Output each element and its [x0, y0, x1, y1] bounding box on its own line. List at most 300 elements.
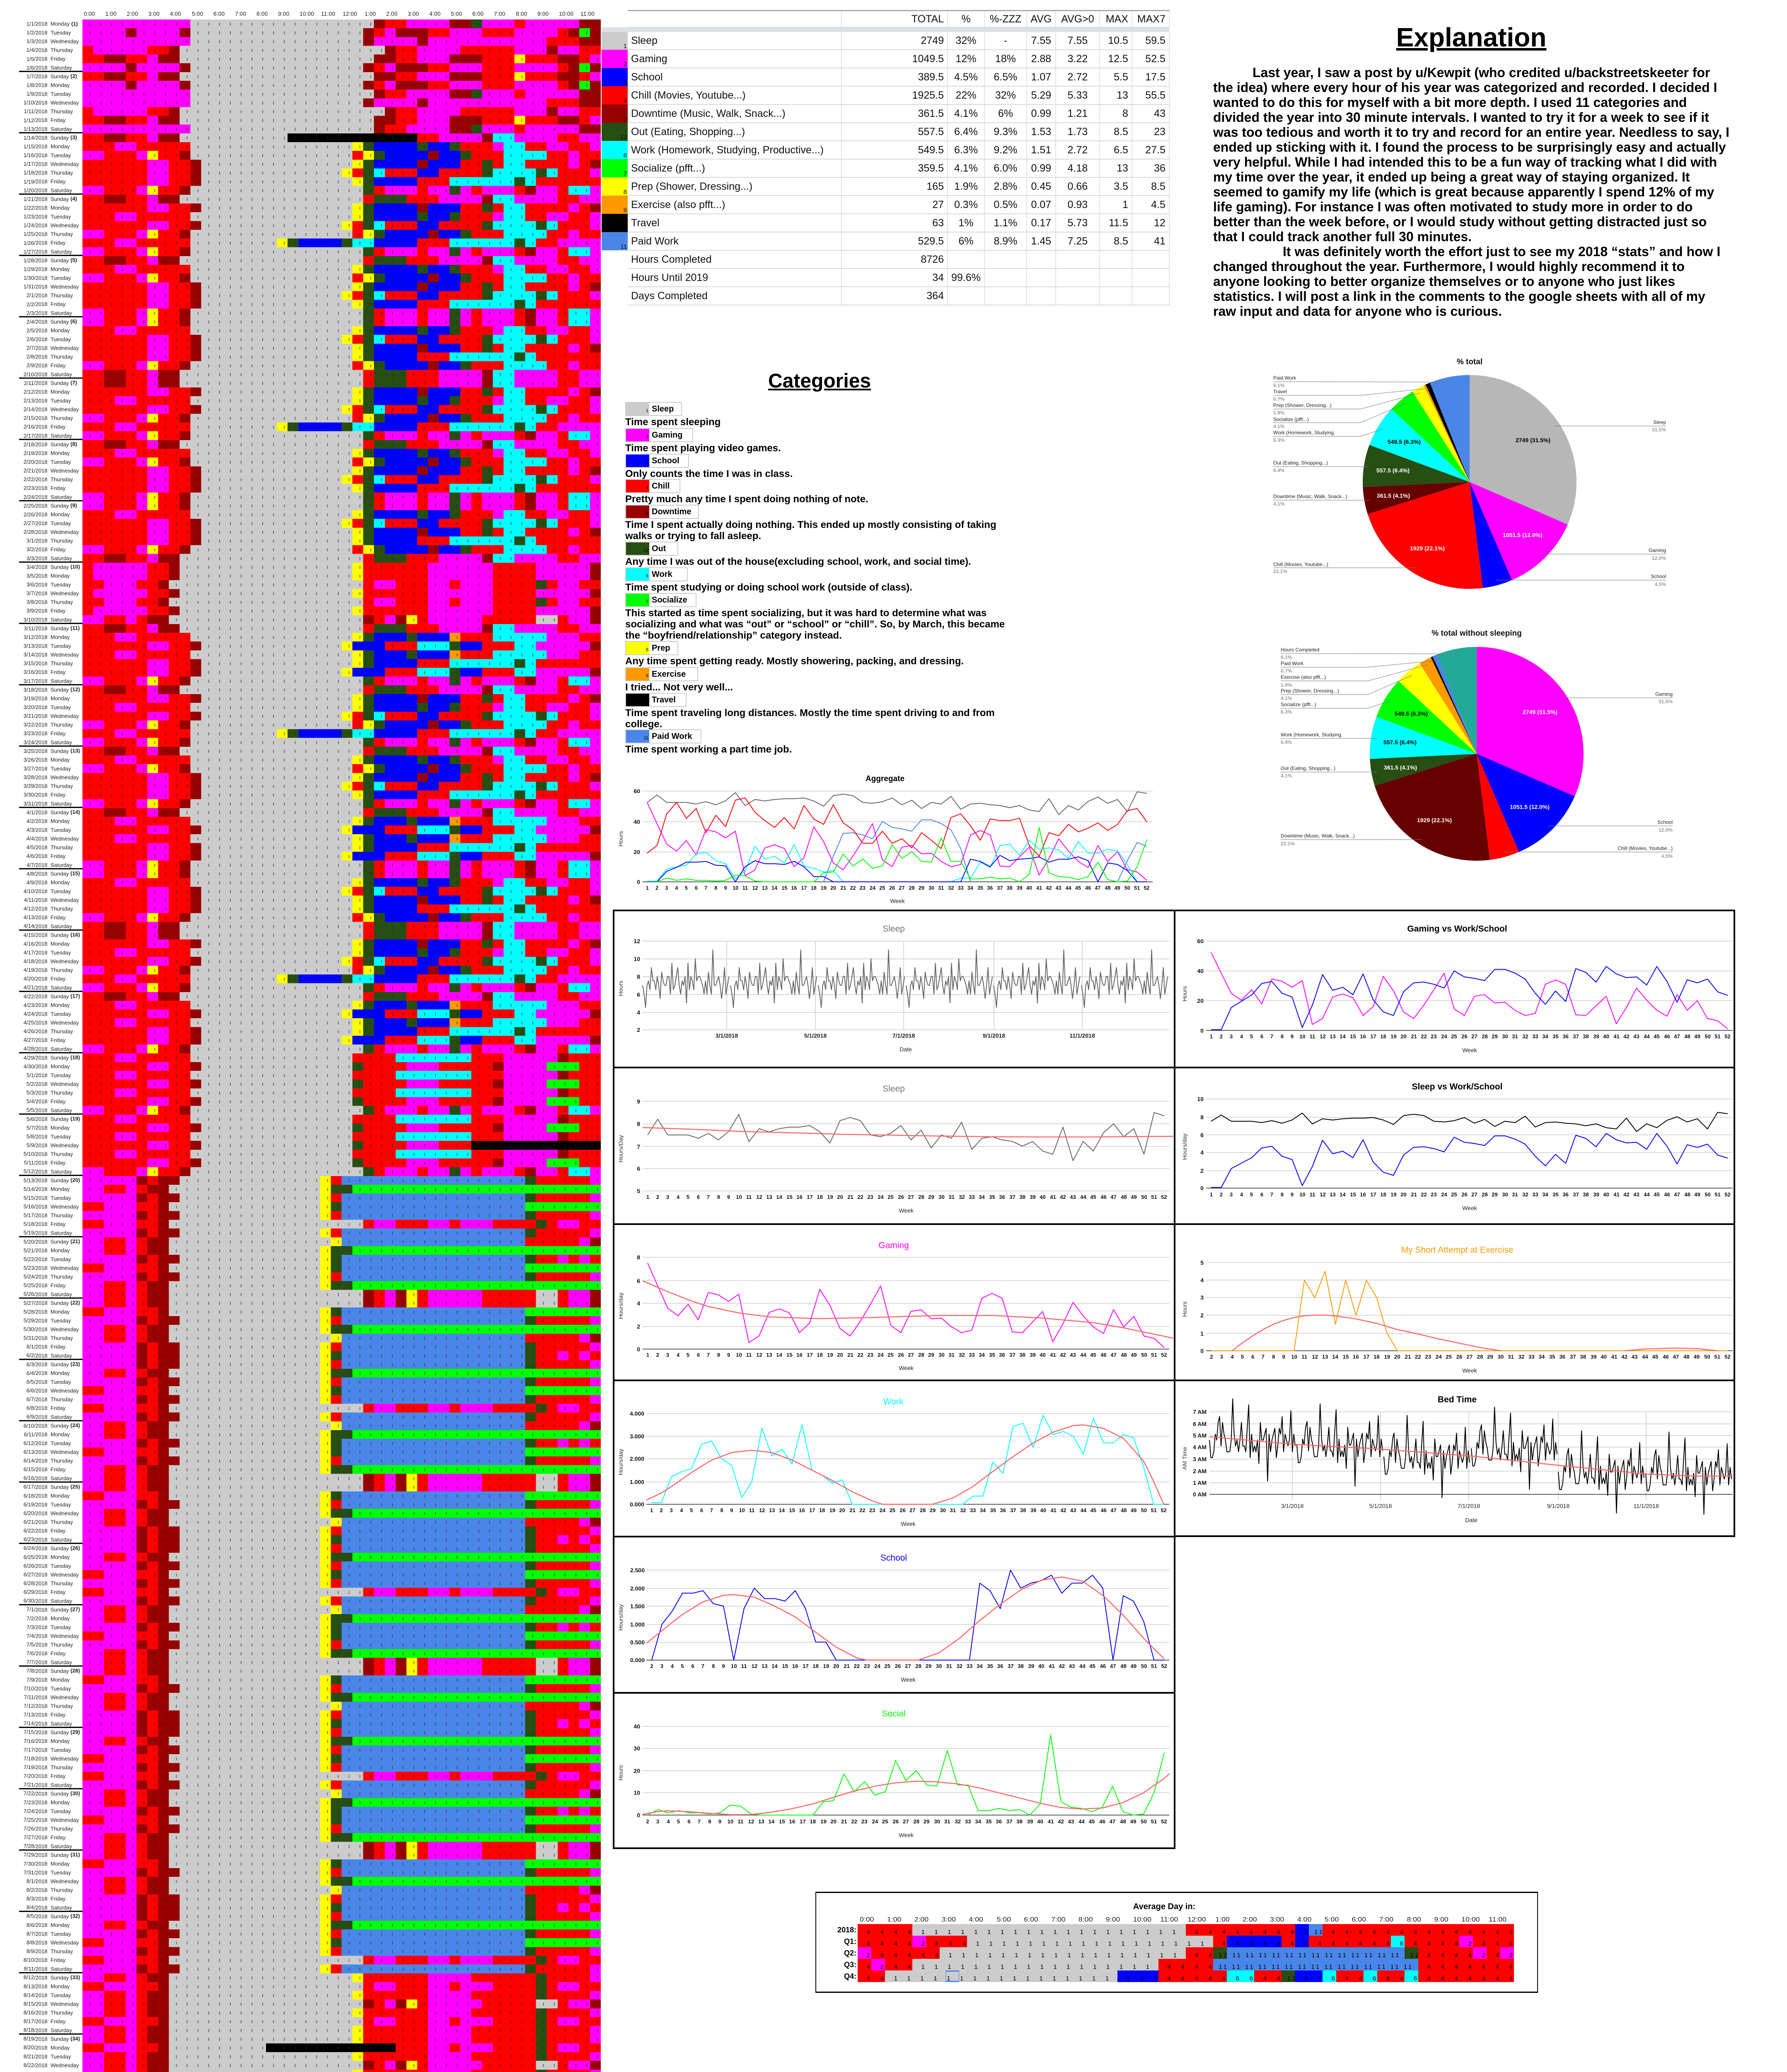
Average Day cell grid: [858, 1924, 1514, 1982]
Average Day row labels: Q1:: [844, 1937, 856, 1946]
pie chart: % total without sleeping: 2749 (31.5%): [1523, 709, 1557, 715]
panel: Bed Time chart: 3 AM: [1193, 1456, 1207, 1462]
legend: Sleep: Time spent sleeping: [625, 416, 721, 428]
pie chart: % total: 557.5 (6.4%): [1376, 467, 1410, 474]
chart: Aggregate weekly hours: 0: [637, 879, 640, 885]
legend: Downtime: [625, 505, 996, 542]
pie chart: % total without sleeping: 361.5 (4.1%): [1384, 764, 1417, 771]
summary statistics table: 8.5: [1151, 181, 1166, 192]
summary statistics table: 3: [624, 79, 627, 86]
legend: Prep: [625, 641, 964, 667]
summary statistics table: 1.9%: [954, 181, 978, 192]
summary statistics table: 1.51: [1031, 144, 1051, 156]
legend: Prep: 8: [646, 647, 648, 652]
summary statistics table: 6.0%: [994, 162, 1017, 174]
summary statistics table: 557.5: [918, 126, 944, 138]
summary statistics table: 165: [926, 181, 944, 192]
legend: Gaming: 2: [646, 434, 648, 439]
panel: Sleep weekly chart: 8: [637, 1121, 640, 1127]
legend: Travel: [625, 693, 995, 730]
Average Day row labels: Q4:: [844, 1972, 856, 1980]
explanation body text: life gaming). For instance I was often motivated to study more in order to do: [1213, 199, 1693, 214]
legend: Socialize: 7: [646, 599, 648, 604]
summary statistics table: Exercise (also pfft...): [631, 199, 725, 211]
summary statistics table: 529.5: [918, 235, 944, 247]
summary statistics table: 364: [926, 290, 944, 302]
summary statistics table: Downtime (Music, Walk, Snack...): [631, 108, 786, 119]
summary statistics table: 4.18: [1068, 162, 1088, 174]
panel: Gaming vs Work/School chart: Gaming vs Work/School: [1407, 924, 1507, 934]
pie chart: % total: 0.7%: [1273, 396, 1285, 402]
panel: Sleep vs Work/School chart: 6: [1200, 1132, 1204, 1138]
explanation body text: divided the year into 30 minute intervals. I wanted to try it for a week to see if it: [1213, 110, 1709, 125]
summary statistics table: 0.17: [1031, 217, 1051, 229]
panel: School weekly chart: Week: [901, 1676, 916, 1683]
pie chart: % total: 4.1%: [1273, 501, 1285, 507]
summary statistics table: Hours Until 2019: [631, 272, 708, 283]
pie chart: % total: Prep (Shower, Dressing...): [1273, 402, 1332, 408]
summary statistics table: 11.5: [1109, 217, 1128, 229]
summary statistics table: 0.93: [1068, 199, 1088, 211]
pie chart: % total without sleeping: Work (Homework, Studying,: [1281, 732, 1342, 738]
summary statistics table: 4: [624, 97, 627, 104]
pie chart: % total without sleeping: 12.0%: [1659, 827, 1673, 833]
pie chart: % total without sleeping: 1929 (22.1%): [1417, 817, 1452, 823]
pie chart: % total without sleeping: 557.5 (6.4%): [1383, 739, 1417, 746]
pie chart: % total without sleeping: [1281, 629, 1673, 859]
summary statistics table: 8.5: [1114, 126, 1128, 138]
legend: Socialize: This started as time spent socializing, but it was hard to determine what was: [625, 608, 987, 619]
summary statistics table: 6: [624, 152, 627, 159]
summary statistics table: 23: [1154, 126, 1166, 138]
legend: Chill: Chill: [652, 482, 670, 491]
summary statistics table: 0.07: [1031, 199, 1051, 211]
pie chart: % total: Travel: [1273, 389, 1287, 395]
panel: Work weekly chart: 0.000: [630, 1501, 644, 1508]
panel: Gaming vs Work/School chart: 40: [1197, 968, 1204, 974]
panel: School weekly chart: 2.000: [630, 1585, 645, 1592]
panel: My Short Attempt at Exercise chart: 4: [1200, 1277, 1204, 1283]
summary statistics table: 2.72: [1068, 144, 1088, 156]
panel: My Short Attempt at Exercise chart: 3: [1200, 1294, 1204, 1301]
summary statistics table: 5.29: [1031, 90, 1051, 101]
summary statistics table: 1.1%: [994, 217, 1017, 229]
legend: Out: 12: [643, 548, 648, 553]
panel: Sleep vs Work/School chart: 4: [1200, 1149, 1204, 1156]
panel: Sleep daily chart: 11/1/2018: [1069, 1032, 1095, 1039]
panel: Social weekly chart: 20: [634, 1767, 640, 1774]
legend: Downtime: walks or trying to fall asleep.: [625, 530, 761, 542]
pie chart: % total: % total: [1457, 358, 1482, 366]
panel: Social weekly chart: Social: [882, 1709, 906, 1719]
pie chart: % total: 1.9%: [1273, 410, 1285, 416]
panel: Gaming weekly chart: 0: [637, 1346, 640, 1353]
panel: Bed Time chart: 0 AM: [1193, 1491, 1207, 1498]
chart: Aggregate weekly hours: 20: [634, 849, 640, 855]
summary statistics table: 8: [624, 189, 627, 196]
legend: School: Only counts the time I was in class.: [625, 468, 793, 479]
legend: Travel: college.: [625, 719, 662, 730]
panel: Sleep daily chart: 9/1/2018: [983, 1032, 1005, 1039]
summary statistics table: 27.5: [1145, 144, 1166, 156]
summary statistics table: Hours Completed: [631, 254, 712, 265]
panel: Gaming vs Work/School chart: [1175, 910, 1734, 1067]
pie chart: % total without sleeping: 549.5 (6.3%): [1395, 710, 1428, 717]
panel: Gaming vs Work/School chart: 60: [1197, 938, 1204, 944]
chart: Aggregate weekly hours: Week: [890, 898, 905, 904]
summary statistics table: 6%: [998, 108, 1013, 119]
panel: Sleep weekly chart: 5: [637, 1188, 640, 1194]
panel: School weekly chart: 1.500: [630, 1603, 645, 1610]
panel: Sleep vs Work/School chart: Week: [1462, 1205, 1477, 1211]
summary statistics table: 8.9%: [994, 235, 1017, 247]
summary statistics table: 359.5: [918, 162, 944, 174]
panel: Bed Time chart: 11/1/2018: [1633, 1503, 1659, 1509]
legend: Out: Any time I was out of the house(excluding school, work, and social time).: [625, 556, 971, 567]
pie chart: % total without sleeping: 31.5%: [1659, 699, 1673, 704]
panel: Sleep weekly chart: Sleep: [883, 1084, 905, 1094]
summary statistics table: 18%: [995, 53, 1016, 65]
Average Day row labels: Q3:: [844, 1961, 856, 1969]
pie chart: % total without sleeping: 0.7%: [1281, 668, 1292, 674]
panel: Sleep daily chart: 4: [637, 1009, 640, 1016]
Average Day cell grid: 111111111111111111: [949, 1952, 1186, 1959]
panel: Bed Time chart: 3/1/2018: [1281, 1503, 1303, 1509]
pie chart: % total: 1051.5 (12.0%): [1503, 532, 1543, 538]
pie chart: % total: Work (Homework, Studying,: [1273, 430, 1335, 436]
legend: Gaming: [625, 428, 781, 454]
explanation body text: seemed to gamify my life (which is great because apparently I spend 12% of my: [1213, 184, 1714, 199]
pie chart: % total: 6.4%: [1273, 467, 1285, 473]
pie chart: % total: 6.3%: [1273, 437, 1285, 443]
summary statistics table: 8726: [921, 254, 944, 265]
summary statistics table: 1: [624, 43, 627, 50]
summary statistics table: 52.5: [1145, 53, 1166, 65]
panel: Bed Time chart: [1175, 1380, 1734, 1536]
chart: Aggregate weekly hours: 60: [634, 788, 640, 794]
panel: Average Day table: [815, 1892, 1538, 1993]
summary statistics table: AVG: [1030, 13, 1052, 25]
panel: Sleep daily chart: 12: [634, 938, 640, 944]
pie chart: % total without sleeping: Out (Eating, Shopping...): [1281, 765, 1335, 771]
panel: Sleep daily chart: [614, 910, 1175, 1067]
summary statistics table: 9.2%: [994, 144, 1017, 156]
summary statistics table: 3.5: [1114, 181, 1128, 192]
legend: Chill: 4: [646, 485, 648, 490]
panel: Social weekly chart: [614, 1693, 1175, 1848]
summary statistics table: 0.99: [1031, 108, 1051, 119]
summary statistics table: MAX7: [1137, 13, 1166, 25]
Average Day row labels: Q2:: [844, 1949, 856, 1957]
panel: My Short Attempt at Exercise chart: [1175, 1224, 1734, 1380]
explanation body text: very helpful. While I had intended this to be a fun way of tracking what I did with: [1213, 155, 1717, 169]
panel: Sleep weekly chart: 7: [637, 1143, 640, 1150]
pie chart: % total: 4.1%: [1273, 424, 1285, 429]
summary statistics table: 36: [1154, 162, 1166, 174]
pie chart: % total without sleeping: Paid Work: [1281, 661, 1304, 666]
summary statistics table: 9: [624, 207, 627, 214]
chart: Aggregate weekly hours: 40: [634, 818, 640, 825]
Average Day title: Average Day in:: [1133, 1902, 1195, 1911]
legend: Sleep: 1: [646, 408, 648, 413]
summary statistics table: 1049.5: [912, 53, 944, 65]
panel: Sleep daily chart: Sleep: [883, 924, 905, 934]
legend: Paid Work: Paid Work: [652, 732, 692, 741]
pie chart: % total: Socialize (pfft...): [1273, 416, 1309, 422]
summary statistics table: 2: [624, 61, 627, 68]
panel: Bed Time chart: Bed Time: [1438, 1395, 1477, 1404]
summary statistics table: Prep (Shower, Dressing...): [631, 181, 752, 192]
summary statistics table: 6.5%: [994, 71, 1017, 83]
legend: Prep: Prep: [652, 644, 670, 653]
panel: Gaming weekly chart: Week: [899, 1365, 914, 1371]
heatmap year and weekday label column with week separators: [0, 19, 82, 2072]
summary statistics table: 3.22: [1068, 53, 1088, 65]
summary statistics table: Travel: [631, 217, 660, 229]
panel: Bed Time chart: 4 AM: [1193, 1444, 1207, 1450]
pie chart: % total: Paid Work: [1273, 375, 1296, 381]
legend: School: [625, 454, 793, 479]
summary statistics table: 6.5: [1114, 144, 1128, 156]
Average Day time header: [860, 1916, 1506, 1923]
pie chart: % total without sleeping: Chill (Movies, Youtube...): [1618, 845, 1673, 851]
pie chart: % total without sleeping: 6.4%: [1281, 739, 1292, 745]
panel: Bed Time chart: 2 AM: [1193, 1468, 1207, 1474]
legend: Downtime: Time I spent actually doing nothing. This ended up mostly consisting of taking: [625, 519, 996, 530]
panel: Sleep weekly chart: 6: [637, 1165, 640, 1172]
pie chart: % total: [1273, 358, 1666, 587]
panel: Work weekly chart: Work: [883, 1397, 904, 1406]
panel: Gaming weekly chart: Hours/day: [617, 1293, 624, 1319]
panel: Work weekly chart: 3.000: [630, 1433, 644, 1440]
summary statistics table: 0.3%: [954, 199, 978, 211]
pie chart: % total: 12.0%: [1652, 555, 1666, 561]
summary statistics table: 1%: [958, 217, 974, 229]
heatmap time-of-day header: [84, 10, 595, 17]
summary statistics table: 2.72: [1068, 71, 1088, 83]
first week number label: (1): [71, 21, 78, 27]
panel: Social weekly chart: Week: [899, 1832, 914, 1838]
Average Day row labels: 2018:: [837, 1926, 856, 1934]
summary statistics table: 5: [624, 116, 627, 123]
panel: Work weekly chart: 2.000: [630, 1455, 644, 1462]
summary statistics table: 8: [1122, 108, 1128, 119]
explanation body text: was too tedious and worth it to try and record for an entire year. Needless to say, I: [1213, 125, 1729, 140]
panel: School weekly chart: Hours/day: [617, 1604, 624, 1631]
pie chart: % total: 22.1%: [1273, 569, 1287, 574]
panel: Gaming vs Work/School chart: Hours: [1181, 986, 1188, 1002]
summary statistics table: -: [1004, 35, 1007, 46]
summary statistics table: 7: [624, 170, 627, 177]
panel: Sleep daily chart: 10: [634, 956, 640, 962]
panel: My Short Attempt at Exercise chart: Hours: [1181, 1301, 1188, 1317]
legend: Socialize: socializing and what was “out” or “school” or “chill”. So, by March, this became: [625, 619, 1005, 630]
panel: My Short Attempt at Exercise chart: 1: [1200, 1330, 1204, 1337]
summary statistics table: 63: [932, 217, 944, 229]
chart: Aggregate weekly hours: [617, 775, 1153, 904]
summary statistics table: 4.1%: [954, 108, 978, 119]
panel: Gaming weekly chart: 2: [637, 1323, 640, 1330]
pie chart: % total without sleeping: 6.3%: [1281, 709, 1292, 715]
panel: My Short Attempt at Exercise chart: Week: [1462, 1367, 1477, 1374]
Average Day cell grid: 111111111111111111: [921, 1963, 1158, 1970]
panel: Social weekly chart: 0: [637, 1812, 640, 1818]
panel: My Short Attempt at Exercise chart: 5: [1200, 1259, 1204, 1266]
legend: Work: Time spent studying or doing school work (outside of class).: [625, 582, 912, 593]
summary statistics table: 8.5: [1114, 235, 1128, 247]
panel: Gaming weekly chart: 8: [637, 1254, 640, 1261]
panel: Sleep daily chart: 7/1/2018: [892, 1032, 915, 1039]
pie chart: % total without sleeping: Gaming: [1655, 691, 1673, 697]
panel: Sleep vs Work/School chart: 0: [1200, 1185, 1204, 1191]
panel: Bed Time chart: 1 AM: [1193, 1479, 1207, 1486]
summary statistics table: 6%: [958, 235, 974, 247]
panel: Gaming vs Work/School chart: 0: [1200, 1027, 1204, 1034]
Average Day cell grid: 111111111111111111: [976, 1940, 1213, 1947]
legend: Socialize: Socialize: [652, 595, 687, 605]
explanation body text: my time over the year, it ended up being a great way of staying organized. It: [1213, 169, 1690, 184]
summary statistics table: 0.45: [1031, 181, 1051, 192]
panel: Gaming vs Work/School chart: 20: [1197, 997, 1204, 1004]
pie chart: % total: School: [1651, 574, 1666, 579]
summary statistics table: 59.5: [1145, 35, 1166, 46]
summary statistics table: 13: [1117, 90, 1128, 101]
legend: Out: Out: [652, 544, 666, 553]
legend: Paid Work: Time spent working a part time job.: [625, 744, 792, 755]
summary statistics table: 0.99: [1031, 162, 1051, 174]
summary statistics table: 11: [620, 243, 627, 250]
panel: Work weekly chart: Hours/day: [617, 1449, 624, 1475]
panel: Sleep weekly chart: Hours/Day: [617, 1135, 624, 1162]
summary statistics table: 34: [932, 272, 944, 283]
panel: Sleep vs Work/School chart: 2: [1200, 1167, 1204, 1174]
summary statistics table: Socialize (pfft...): [631, 162, 705, 174]
summary statistics table: 2749: [921, 35, 944, 46]
pie chart: % total without sleeping: Exercise (also pfft...): [1281, 674, 1326, 680]
panel: Sleep daily chart: 3/1/2018: [716, 1032, 738, 1039]
panel: Sleep daily chart: 2: [637, 1026, 640, 1033]
explanation body text: anyone looking to better organize themselves or to anyone who just likes: [1213, 274, 1675, 289]
Average Day cell grid: 11111111111111111: [894, 1975, 1117, 1982]
panel: Sleep vs Work/School chart: Hours/day: [1181, 1133, 1188, 1160]
summary statistics table: 10.5: [1108, 35, 1128, 46]
pie chart: % total without sleeping: 22.1%: [1281, 841, 1295, 847]
legend: Gaming: Time spent playing video games.: [625, 443, 781, 454]
pie chart: % total without sleeping: 1.9%: [1281, 682, 1292, 688]
panel: Bed Time chart: 5 AM: [1193, 1432, 1207, 1439]
summary statistics table: 5.33: [1068, 90, 1088, 101]
Average Day cell grid: 11111111111111111111: [921, 1929, 1186, 1936]
panel: Social weekly chart: 10: [634, 1789, 640, 1796]
summary statistics table: 1.73: [1068, 126, 1088, 138]
panel: Sleep vs Work/School chart: [1175, 1067, 1734, 1224]
summary statistics table: 389.5: [918, 71, 944, 83]
legend: Downtime: 5: [646, 511, 648, 516]
summary statistics table: Paid Work: [631, 235, 679, 247]
summary statistics table: 12: [1154, 217, 1166, 229]
legend: Prep: Any time spent getting ready. Mostly showering, packing, and dressing.: [625, 656, 964, 667]
legend: Downtime: Downtime: [652, 507, 692, 516]
panel: School weekly chart: 1.000: [630, 1621, 645, 1628]
panel: Sleep weekly chart: [614, 1067, 1175, 1224]
summary statistics table: MAX: [1106, 13, 1128, 25]
explanation body text: the idea) where every hour of his year was categorized and recorded. I decided I: [1213, 80, 1717, 95]
pie chart: % total without sleeping: 4.1%: [1281, 773, 1292, 779]
summary statistics table: 55.5: [1145, 90, 1166, 101]
panel: Work weekly chart: 1.000: [630, 1479, 644, 1485]
pie chart: % total without sleeping: Socialize (pfft...): [1281, 702, 1316, 707]
panel: Sleep daily chart: 5/1/2018: [804, 1032, 827, 1039]
panel: Bed Time chart: 7/1/2018: [1458, 1503, 1480, 1509]
summary statistics table: 1.07: [1031, 71, 1051, 83]
heading: Categories: Categories: [768, 370, 871, 392]
summary statistics table: 549.5: [918, 144, 944, 156]
summary statistics table: 2.8%: [994, 181, 1017, 192]
summary statistics table: 5.73: [1068, 217, 1088, 229]
legend: Paid Work: 11: [644, 736, 648, 741]
explanation body text: that I could track another full 30 minutes.: [1213, 229, 1472, 244]
panel: My Short Attempt at Exercise chart: 2: [1200, 1312, 1204, 1319]
chart: Aggregate weekly hours: Hours: [617, 831, 624, 847]
summary statistics table: %: [961, 13, 971, 25]
panel: Gaming weekly chart: 6: [637, 1278, 640, 1284]
panel: Bed Time chart: AM Time: [1181, 1447, 1188, 1470]
pie chart: % total: Gaming: [1649, 547, 1666, 553]
legend: Sleep: [625, 402, 721, 428]
pie chart: % total: 6.1%: [1273, 382, 1285, 388]
summary statistics table: Chill (Movies, Youtube...): [631, 90, 746, 101]
pie chart: % total: 1929 (22.1%): [1410, 545, 1445, 552]
legend: Out: [625, 542, 971, 567]
pie chart: % total: Downtime (Music, Walk, Snack...): [1273, 494, 1347, 499]
summary statistics table: Sleep: [631, 35, 658, 46]
legend: Work: [625, 567, 912, 593]
chart: Aggregate weekly hours: Aggregate: [866, 775, 904, 783]
summary statistics table: 12: [620, 134, 627, 141]
Average Day row labels: [825, 1924, 856, 1982]
explanation body text: wanted to do this for myself with a bit more depth. I used 11 categories and: [1213, 95, 1687, 110]
panel: Work weekly chart: 4.000: [630, 1410, 644, 1417]
summary statistics table: 7.55: [1031, 35, 1051, 46]
panel: Sleep daily chart: Date: [900, 1046, 912, 1053]
summary statistics table: %-ZZZ: [990, 13, 1021, 25]
panel: Sleep vs Work/School chart: 8: [1200, 1114, 1204, 1121]
legend: Chill: Pretty much any time I spent doing nothing of note.: [625, 494, 868, 505]
legend: Gaming: Gaming: [652, 431, 682, 440]
summary statistics table: 1.45: [1031, 235, 1051, 247]
summary statistics table: 5.5: [1114, 71, 1128, 83]
legend: Exercise: [625, 667, 733, 693]
summary statistics table: 2.88: [1031, 53, 1051, 65]
summary statistics table: 361.5: [918, 108, 944, 119]
legend: Socialize: the “boyfriend/relationship” category instead.: [625, 630, 842, 641]
summary statistics table: 4.1%: [954, 162, 978, 174]
panel: My Short Attempt at Exercise chart: 0: [1200, 1348, 1204, 1354]
legend: Paid Work: [625, 729, 792, 755]
panel: Sleep weekly chart: Week: [899, 1207, 914, 1214]
summary statistics table: 6.4%: [954, 126, 978, 138]
heading: Explanation: Explanation: [1396, 22, 1546, 52]
summary statistics table: 13: [1117, 162, 1128, 174]
Average Day cell grid: 11 11 11 11 11 11 11 11 11 11 11 11 11 11 11: [1219, 1963, 1413, 1970]
summary statistics table: Work (Homework, Studying, Productive...): [631, 144, 824, 156]
summary statistics table: 7.55: [1068, 35, 1088, 46]
explanation body text: ended up sticking with it. I found the process to be surprisingly easy and actually: [1213, 140, 1726, 155]
summary statistics table: 6.3%: [954, 144, 978, 156]
summary statistics table: TOTAL: [912, 13, 944, 25]
summary statistics table: 41: [1154, 235, 1166, 247]
panel: Work weekly chart: [614, 1380, 1175, 1537]
